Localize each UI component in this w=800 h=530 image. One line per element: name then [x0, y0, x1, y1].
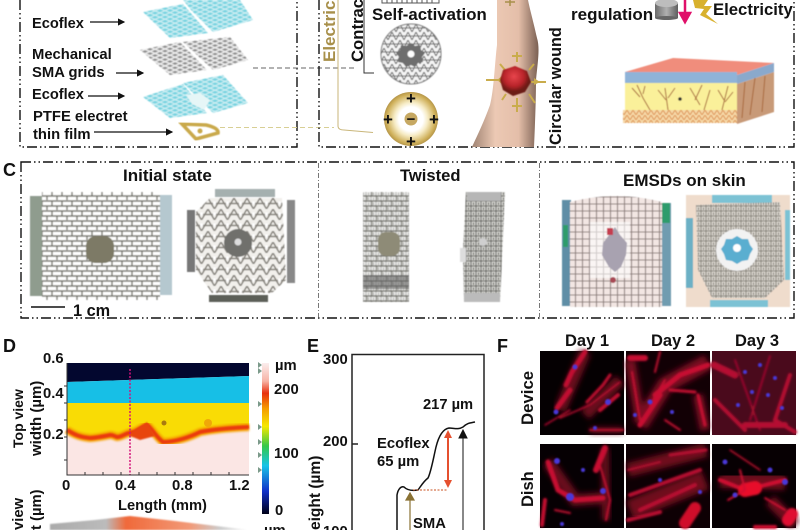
arrow: pink down [680, 0, 690, 22]
micrograph: device day 2 [626, 351, 710, 435]
icon: cylinder [655, 0, 678, 20]
label: Self-activation: Self-activation [372, 5, 487, 24]
layer: lower Ecoflex [143, 75, 248, 118]
arrow: red double [447, 436, 449, 482]
connector: SMA to circular grid [253, 67, 355, 69]
x tick labels: 0.8 [172, 478, 193, 494]
heading: Twisted: Twisted [400, 166, 461, 185]
arrow: PTFE [94, 131, 172, 133]
heading: Day 3: Day 3 [735, 332, 779, 350]
illustration: skin block [623, 58, 774, 124]
x tick labels: 1.2 [229, 478, 250, 494]
scale bar: 1 cm: 1 cm [73, 302, 110, 320]
y tick labels: 0.4 [43, 386, 64, 402]
y tick labels: 0.2 [43, 427, 64, 443]
arrow: SMA height [406, 493, 414, 530]
colorbar: 100 [274, 446, 299, 462]
row label: Dish: Dish [519, 471, 537, 507]
icon: PTFE electret layer [182, 124, 218, 139]
label: Electricity: Electricity [713, 0, 793, 19]
icon: electret disc with charges [383, 89, 439, 151]
layer: SMA grids [140, 37, 248, 75]
micrograph: dish day 1 [540, 444, 624, 528]
label: Ecoflex top: Ecoflex [32, 16, 85, 32]
y axis title width: width (µm) [28, 381, 45, 457]
row label: Device: Device [518, 371, 537, 425]
label: PTFE electret thin film: thin film [33, 127, 91, 143]
x tick labels: 0.4 [115, 478, 136, 494]
icon: electret disc with charges: − [407, 111, 416, 128]
label: Contraction: Contrac [348, 0, 367, 62]
photo: twisted device 1 [363, 192, 409, 302]
y axis title top view: Top view [10, 389, 26, 448]
y tick labels: 0.6 [43, 351, 64, 367]
arrow: SMA grids [116, 72, 143, 74]
axis ticks [64, 363, 249, 475]
panel: photographs (C) [3, 160, 794, 320]
chart frame [352, 354, 484, 530]
icon: lightning [693, 0, 718, 24]
panel: height profile (E) [307, 336, 484, 530]
icon: circular SMA grid [381, 24, 441, 84]
photo: EMSD on skin 2 [686, 195, 790, 307]
colorbar: 0 [275, 503, 283, 519]
tick 200 [352, 443, 358, 445]
photo: EMSD on skin 1 [562, 196, 671, 307]
icon: electret disc with charges: + [406, 89, 416, 108]
label: Ecoflex 65 µm: Ecoflex [377, 436, 430, 452]
label: Electric: Electric [320, 1, 339, 62]
arrowheads red [444, 430, 452, 488]
divider: initial / twisted [318, 163, 320, 317]
icon: electret disc with charges: + [383, 110, 393, 129]
panel: mechanism (B) [319, 0, 794, 151]
label: Circular wound: Circular wound [547, 27, 565, 145]
heading: Initial state: Initial state [123, 166, 212, 185]
illustration: arm [472, 0, 539, 147]
icon: electret disc with charges: + [429, 110, 439, 129]
micrograph: dish day 2 [626, 444, 710, 528]
heading: EMSDs on skin: EMSDs on skin [623, 171, 746, 190]
label: 217 µm: 217 µm [423, 397, 473, 413]
line: contraction bracket [364, 0, 374, 73]
micrograph: device day 1 [540, 351, 624, 435]
colorbar: µm [275, 358, 297, 374]
micrograph: dish day 3 [712, 444, 796, 528]
chart: top view height map [67, 363, 249, 475]
icon: mini grid strip [382, 0, 439, 3]
colorbar [258, 358, 299, 519]
layer: top Ecoflex [143, 0, 253, 38]
heading: Day 2: Day 2 [651, 332, 695, 350]
icon: electret disc with charges: + [406, 132, 416, 151]
panel: cell microscopy (F) [497, 332, 796, 528]
panel: surface maps (D) [3, 336, 299, 530]
label: height unit: t (µm) [29, 489, 45, 530]
y tick labels: 200 [323, 434, 348, 450]
label: Ecoflex 65 µm: 65 µm [377, 454, 419, 470]
panel letter C: C [3, 160, 16, 180]
line: electric bracket [338, 0, 373, 132]
connector: PTFE to electret [220, 126, 334, 128]
divider: twisted / skin [538, 163, 540, 317]
photo: twisted device 2 [460, 192, 505, 302]
dotted level line [413, 489, 448, 491]
label: Mechanical SMA grids: SMA grids [32, 65, 105, 81]
label: Ecoflex lower: Ecoflex [32, 87, 85, 103]
label: PTFE electret thin film: PTFE electret [33, 109, 128, 125]
heading: Day 1: Day 1 [565, 332, 609, 350]
y tick labels: 300 [323, 352, 348, 368]
photo: initial flat device 1 [30, 192, 172, 300]
label: regulation: regulation [571, 5, 653, 24]
panel letter F: F [497, 336, 508, 356]
panel letter D: D [3, 336, 16, 356]
micrograph: device day 3 [712, 351, 796, 435]
y axis title: eight (µm) [307, 456, 324, 530]
arrow: Ecoflex lower [88, 95, 124, 97]
line: height profile [397, 422, 475, 530]
scale bar: 1 cm [31, 302, 110, 320]
x axis title: Length (mm) [118, 498, 207, 514]
label: Mechanical SMA grids: Mechanical [32, 47, 112, 63]
arrow: total height [459, 430, 467, 530]
illustration: circular wound [486, 0, 546, 112]
x tick labels: 0 [62, 478, 70, 494]
chart: side view 3D surface [50, 516, 250, 530]
panel: device layers (A) [20, 0, 297, 147]
photo: initial flat device 2 [187, 189, 295, 302]
arrow: Ecoflex top [90, 21, 124, 23]
label: side view: view [11, 497, 27, 530]
colorbar: 200 [274, 382, 299, 398]
panel letter E: E [307, 336, 319, 356]
